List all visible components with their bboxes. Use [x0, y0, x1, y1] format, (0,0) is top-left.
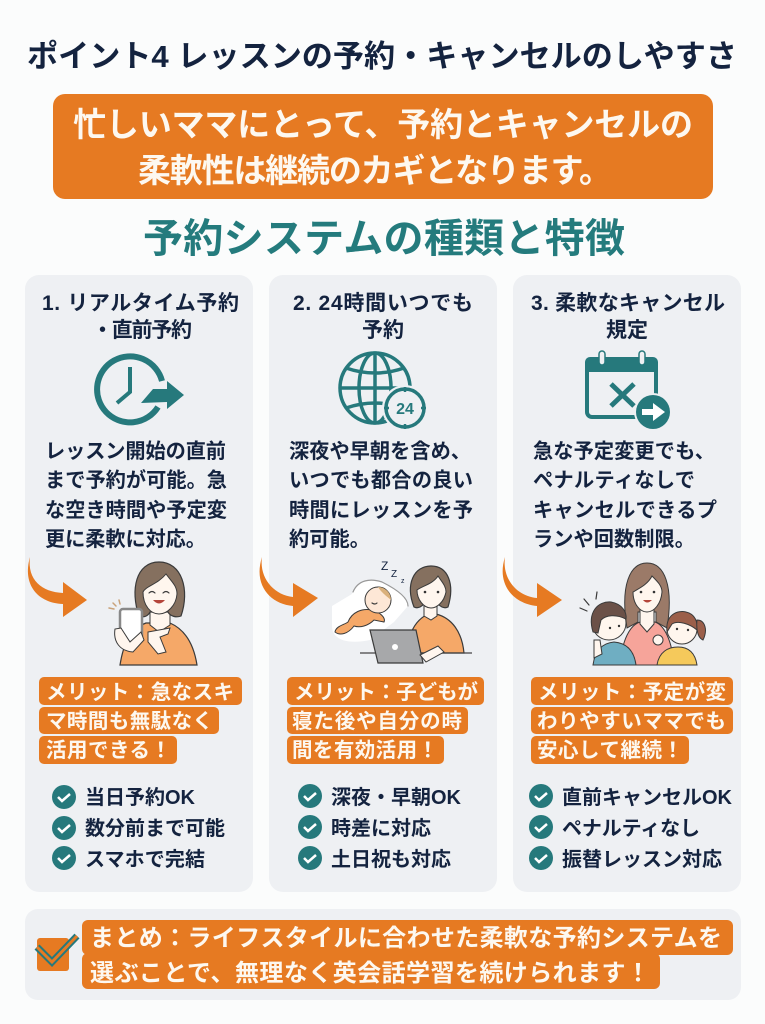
card 2 description: 約可能。	[289, 528, 370, 551]
checklist 2	[298, 784, 462, 871]
section heading: 予約システムの種類と特徴	[143, 217, 625, 261]
card 2 heading	[293, 292, 473, 342]
card 3 heading: 規定	[606, 319, 648, 342]
card 1 heading: ・直前予約	[92, 319, 192, 342]
title: ポイント4 レッスンの予約・キャンセルのしやすさ	[27, 39, 737, 74]
card 3 description	[533, 440, 717, 551]
card 2 heading: 予約	[362, 319, 404, 342]
card 1 heading	[42, 292, 239, 342]
arrow 3	[503, 557, 562, 617]
card 2 description: 時間にレッスンを予	[289, 499, 473, 522]
card 2 heading: 2. 24時間いつでも	[293, 292, 473, 315]
card 3 heading: 3. 柔軟なキャンセル	[531, 292, 725, 315]
arrow 1	[28, 557, 87, 617]
checklist 3: 直前キャンセルOK	[562, 786, 733, 809]
summary callout: 選ぶことで、無理なく英会話学習を続けられます！	[90, 960, 650, 987]
intro banner: 忙しいママにとって、予約とキャンセルの	[73, 106, 693, 143]
merit callout 3: メリット：予定が変	[538, 680, 726, 704]
checklist 1: 当日予約OK	[85, 786, 196, 809]
summary callout: まとめ：ライフスタイルに合わせた柔軟な予約システムを	[90, 925, 722, 952]
card 1 description: レッスン開始の直前	[45, 440, 226, 463]
summary callout	[82, 920, 733, 989]
intro banner	[53, 94, 713, 199]
panel: realtime booking	[25, 275, 253, 892]
icon: globe with 24: 24	[396, 401, 414, 418]
illustration: woman with smartphone	[109, 562, 197, 665]
panel: summary	[25, 909, 741, 1000]
merit callout 2: メリット：子どもが	[294, 680, 478, 704]
merit callout 3: わりやすいママでも	[537, 710, 726, 733]
merit callout 3	[531, 677, 733, 764]
icon: checkbox	[37, 936, 77, 971]
merit callout 1: 活用できる！	[46, 739, 171, 762]
illustration: mother with laptop beside sleeping baby	[332, 559, 472, 663]
arrow 2	[260, 557, 318, 617]
merit callout 1	[39, 677, 242, 764]
checklist 1	[52, 785, 225, 871]
checklist 3	[529, 784, 733, 871]
card 1 description: まで予約が可能。急	[45, 468, 227, 492]
sleeping z letters: Z	[391, 569, 397, 580]
card 2 description: いつでも都合の良い	[289, 469, 473, 492]
card 1 description: 更に柔軟に対応。	[45, 528, 206, 551]
checklist 2: 時差に対応	[331, 817, 431, 840]
illustration: mother with two children	[580, 563, 705, 665]
card 2 description	[289, 440, 473, 551]
sleeping z letters: Z	[381, 559, 388, 573]
sleeping z letters	[381, 559, 405, 585]
card 1 description	[45, 440, 227, 551]
card 1 description: な空き時間や予定変	[45, 499, 227, 522]
merit callout 2: 間を有効活用！	[292, 739, 438, 762]
merit callout 3: 安心して継続！	[537, 739, 683, 762]
checklist 3: ペナルティなし	[562, 817, 700, 840]
card 3 description: 急な予定変更でも、	[533, 440, 715, 463]
sleeping z letters: z	[401, 578, 405, 585]
card 3 heading	[531, 292, 725, 342]
checklist 3: 振替レッスン対応	[562, 848, 722, 871]
merit callout 1: メリット：急なスキ	[46, 681, 234, 704]
icon: calendar with X and arrow	[585, 351, 672, 431]
intro banner: 柔軟性は継続のカギとなります。	[138, 152, 612, 189]
icon: globe with 24	[340, 353, 428, 431]
card 3 description: キャンセルできるプ	[533, 499, 717, 522]
card 2 description: 深夜や早朝を含め、	[289, 440, 471, 463]
merit callout 2	[287, 677, 484, 764]
icon: clock with arrow	[97, 356, 184, 422]
card 1 heading: 1. リアルタイム予約	[42, 292, 239, 315]
card 3 description: ランや回数制限。	[533, 528, 695, 551]
panel: 24-hour booking	[260, 275, 497, 892]
checklist 2: 深夜・早朝OK	[331, 786, 462, 809]
panel: flexible cancellation	[503, 275, 741, 892]
checklist 2: 土日祝も対応	[331, 848, 451, 871]
card 3 description: ペナルティなしで	[533, 469, 695, 492]
merit callout 1: マ時間も無駄なく	[46, 710, 213, 733]
checklist 1: 数分前まで可能	[85, 817, 225, 840]
checklist 1: スマホで完結	[85, 848, 205, 871]
merit callout 2: 寝た後や自分の時	[292, 710, 462, 733]
